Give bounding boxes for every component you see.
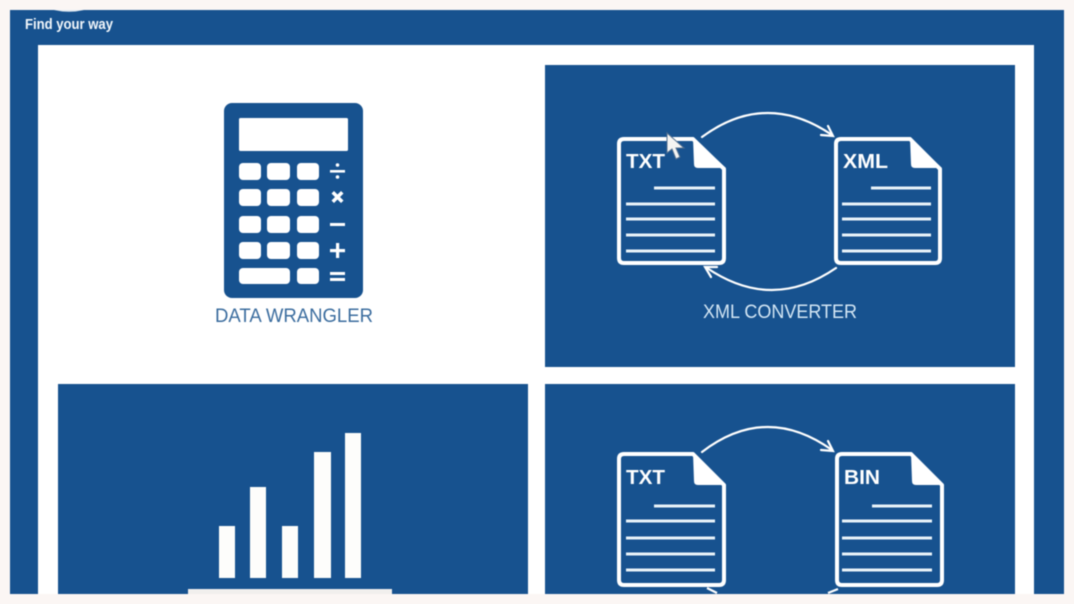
icon: bin document: BIN [844, 467, 880, 489]
icon: mouse cursor [667, 133, 684, 159]
icon: txt document: TXT [626, 151, 665, 173]
icon: txt document [619, 138, 726, 263]
panel: xml converter [545, 65, 1015, 367]
label: data wrangler: DATA WRANGLER [215, 306, 373, 327]
icon: txt document [619, 453, 726, 585]
panel: bar chart [58, 384, 528, 594]
arrow: txt to xml [702, 113, 833, 137]
bar chart [219, 433, 361, 578]
chart base [188, 589, 392, 594]
arrow: bin to txt (cropped) [707, 588, 838, 593]
panel: binary converter [545, 384, 1015, 594]
icon: calculator [224, 103, 363, 298]
icon: txt document: TXT [626, 467, 665, 489]
operator symbols [330, 170, 345, 173]
title: Find your way [25, 16, 114, 33]
panel: data wrangler [215, 103, 373, 327]
icon: xml document: XML [843, 151, 888, 173]
label: xml converter: XML CONVERTER [703, 302, 857, 323]
clipped remnant at top edge [54, 10, 84, 12]
icon: bin document [837, 453, 944, 585]
icon: xml document [836, 138, 942, 263]
arrow: txt to bin [702, 427, 833, 452]
arrow: xml to txt [705, 267, 836, 290]
